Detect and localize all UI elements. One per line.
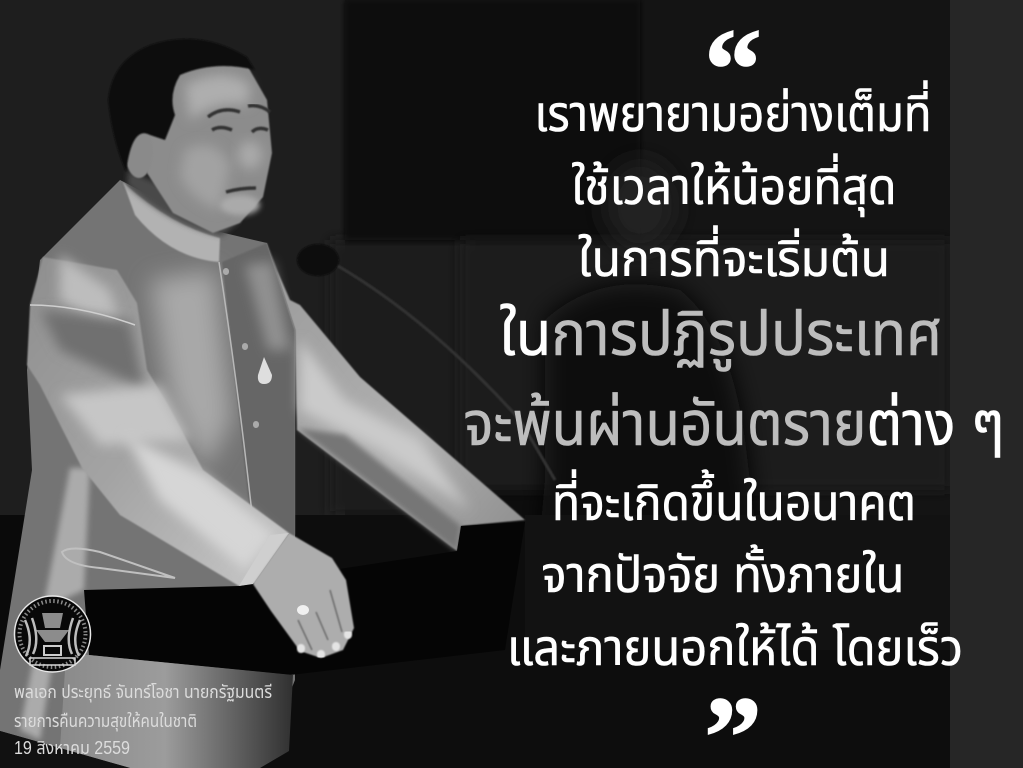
- quote text: [464, 80, 1004, 676]
- ring: [297, 605, 309, 615]
- chin highlight: [220, 195, 260, 215]
- opening quotation mark: “: [704, 6, 762, 133]
- collar: [123, 182, 220, 262]
- bottom-left corner shadow: [0, 731, 130, 768]
- quote line 3: ในการที่จะเริ่มต้น: [578, 225, 890, 287]
- jacket side highlight: [20, 468, 90, 740]
- chest highlight: [150, 270, 232, 470]
- quote line 5: จะพ้นผ่านอันตรายต่าง ๆ: [464, 390, 1004, 459]
- right sleeve: [267, 243, 525, 551]
- date: 19 สิงหาคม 2559: [14, 738, 130, 758]
- ear: [125, 126, 153, 178]
- nose highlight: [238, 141, 262, 169]
- logo: government seal: [14, 596, 90, 672]
- left cuff: [239, 533, 289, 586]
- jacket body: [0, 180, 295, 768]
- badge: [258, 357, 272, 384]
- cheek highlight: [180, 145, 230, 210]
- programme: รายการคืนความสุขให้คนในชาติ: [14, 711, 197, 732]
- quote line 8: และภายนอกให้ได้ โดยเร็ว: [507, 620, 963, 676]
- eyes and mouth: [208, 106, 270, 117]
- forehead highlight: [185, 75, 250, 120]
- front panel: [222, 243, 295, 560]
- sleeve highlights: [60, 255, 125, 340]
- quote line 1: เราพยายามอย่างเต็มที่: [534, 80, 932, 142]
- buttons: [226, 271, 256, 425]
- pocket flap: [62, 548, 175, 578]
- face: [145, 58, 272, 233]
- figure: speaker: [0, 39, 525, 768]
- hand: [253, 533, 354, 658]
- left sleeve: [27, 257, 289, 586]
- quote line 4: ในการปฏิรูปประเทศ: [500, 300, 942, 372]
- hair: [108, 39, 255, 172]
- neck shadow: [127, 170, 240, 236]
- attribution name: พลเอก ประยุทธ์ จันทร์โอชา นายกรัฐมนตรี: [14, 682, 272, 703]
- placket line: [219, 262, 254, 532]
- podium: [0, 522, 525, 768]
- quote line 2: ใช้เวลาให้น้อยที่สุด: [572, 153, 896, 217]
- fingertips: [301, 634, 348, 655]
- quote line 7: จากปัจจัย ทั้งภายใน: [542, 544, 904, 603]
- podium front panel: [60, 655, 293, 768]
- finger gaps: [298, 590, 342, 650]
- microphone: [297, 244, 555, 480]
- attribution: [14, 682, 272, 758]
- quote line 6: ที่จะเกิดขึ้นในอนาคต: [552, 469, 916, 531]
